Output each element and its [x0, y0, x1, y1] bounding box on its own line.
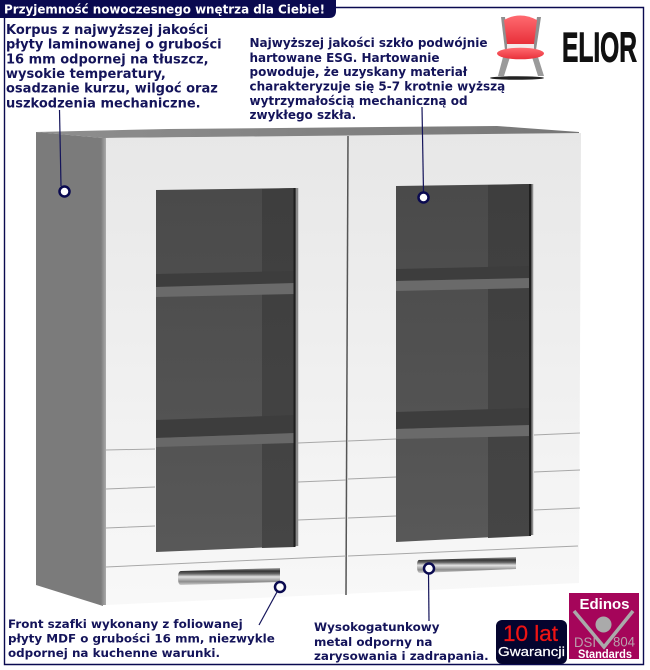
badge: Edinos standards: Edinos	[580, 596, 630, 613]
side edge strip	[101, 138, 106, 605]
left glass panel	[156, 188, 298, 552]
cabinet side panel	[36, 132, 103, 606]
callout: metal handle	[314, 564, 489, 663]
cabinet illustration	[36, 126, 581, 606]
header banner: Przyjemność nowoczesnego wnętrza dla Ciebie!	[4, 2, 325, 16]
cabinet top	[36, 126, 579, 138]
left handle	[178, 568, 280, 585]
callout: body material: płyty laminowanej o grubości	[6, 38, 222, 53]
door gap	[346, 136, 348, 595]
callout: metal handle: zarysowania i zadrapania.	[314, 649, 489, 663]
badge: 10 year warranty	[496, 620, 567, 664]
callout: body material: uszkodzenia mechaniczne.	[6, 96, 201, 111]
front grooves left	[106, 441, 346, 567]
badge: 10 year warranty: 10 lat	[503, 621, 558, 646]
front grooves right	[348, 433, 580, 556]
badge: Edinos standards: Standards	[578, 649, 632, 661]
badge: Edinos standards	[569, 593, 639, 661]
callout: body material: osadzanie kurzu, wilgoć oraz	[6, 82, 218, 97]
callout: MDF front: płyty MDF o grubości 16 mm, niezwykle	[8, 632, 275, 646]
badge: Edinos standards: 804	[613, 634, 635, 650]
right glass panel	[396, 184, 533, 542]
callout: tempered glass: charakteryzuje się 5-7 krotnie wyższą	[250, 80, 505, 94]
callout: tempered glass: Najwyższej jakości szkło podwójnie	[250, 36, 488, 50]
callout: tempered glass: wytrzymałością mechaniczną od	[250, 94, 468, 108]
callout: body material: Korpus z najwyższej jakości	[6, 23, 208, 38]
icon: red chair logo	[490, 16, 544, 80]
callout: tempered glass	[250, 36, 505, 202]
cabinet front	[106, 133, 581, 605]
right handle	[417, 557, 516, 573]
callout: tempered glass: zwykłego szkła.	[250, 108, 356, 122]
callout: body material: 16 mm odpornej na tłuszcz,	[6, 52, 209, 67]
callout: MDF front	[8, 582, 285, 660]
callout: tempered glass: hartowane ESG. Hartowanie	[250, 51, 440, 65]
callout: body material: wysokie temperatury,	[6, 67, 166, 82]
badge: 10 year warranty: Gwarancji	[498, 644, 565, 659]
callout: MDF front: odpornej na kuchenne warunki.	[8, 646, 220, 660]
callout: metal handle: Wysokogatunkowy	[314, 620, 440, 634]
callout: tempered glass: powoduje, że uzyskany materiał	[250, 65, 468, 79]
callout: MDF front: Front szafki wykonany z foliowanej	[8, 617, 243, 631]
badge: Edinos standards: DSI	[574, 634, 596, 650]
callout: metal handle: metal odporny na	[314, 635, 432, 649]
callout: body material	[6, 23, 222, 196]
